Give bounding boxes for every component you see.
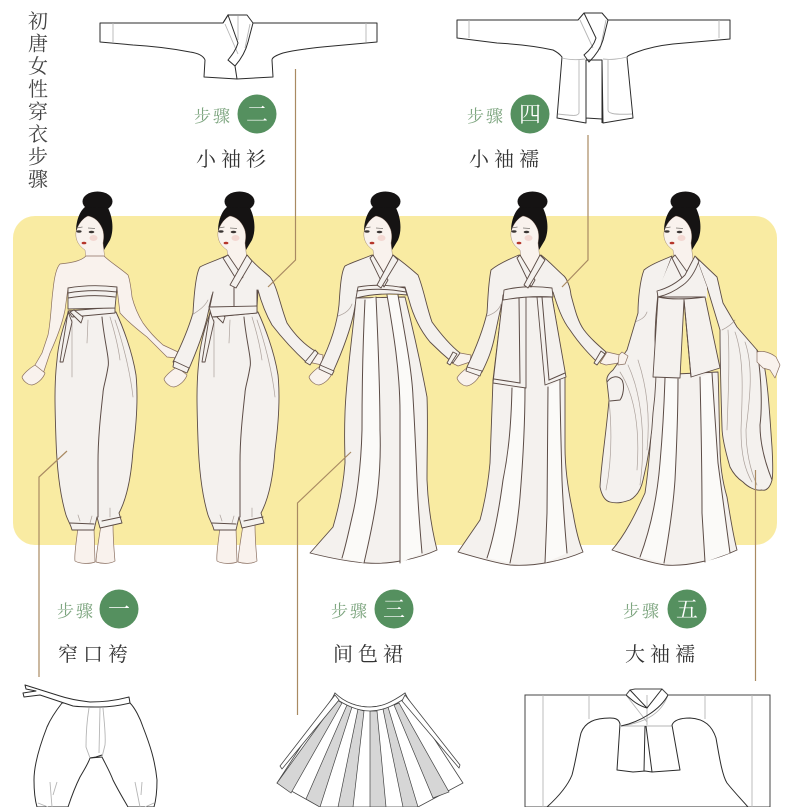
guide line: step 3 [298,452,351,715]
right hand [600,352,620,365]
figure 2: small sleeve shirt [164,192,323,563]
garment name: 间色裙 [333,643,408,666]
head [218,192,254,284]
jacket right panel [537,297,566,385]
step 1 heading: 一 [108,597,130,622]
skirt light panels [342,297,380,563]
skirt [612,372,737,565]
chest fill [658,257,707,298]
head [364,192,400,284]
bodice and sleeves [320,255,460,372]
guide line: step 4 [562,135,588,287]
skirt lines [487,380,567,563]
skirt lines [342,295,422,563]
step 5 heading [623,590,706,666]
step 3 heading [331,590,414,666]
step 2 heading [194,94,276,171]
head [76,192,112,284]
left sleeve folds [606,312,648,490]
left hand [457,366,480,386]
jacket left panel [493,295,526,388]
figure 5: large sleeve robe [600,192,780,565]
figure 4: small sleeve jacket [457,192,620,565]
figure 3: striped skirt [309,192,471,563]
line art: trousers [23,685,157,807]
vertical title: 衣 [28,123,48,146]
step 2 heading: 二 [246,102,268,127]
step label: 步骤 [623,602,661,621]
collar [517,255,535,287]
right sleeve folds [722,320,757,485]
trousers [55,307,137,563]
waistband [333,693,407,711]
left tie [280,695,339,769]
number badge [374,590,414,628]
vertical title: 女 [28,55,48,78]
right hand [452,353,471,366]
waist tie [209,306,257,317]
step label: 步骤 [57,602,95,621]
jacket body [653,297,720,378]
bust band [356,285,407,298]
right large sleeve [696,257,773,490]
sleeves and jacket shoulders [467,255,606,372]
line art: small sleeve shirt [100,15,377,79]
number badge [238,94,276,134]
right hand [757,351,780,378]
torso and arms [35,256,178,377]
collar [223,255,243,282]
chest wrap [68,286,117,309]
cuffs [319,365,334,375]
skirt [310,297,437,563]
garment name: 窄口袴 [58,643,133,666]
step 5 heading: 五 [676,597,698,622]
right hand [308,352,323,365]
left hand [309,365,332,385]
vertical title: 穿 [28,100,48,123]
yellow background panel [13,216,777,545]
step 3 heading: 三 [383,597,405,622]
figure 1: trousers only [22,192,178,563]
guide line: step 1 [39,451,67,677]
step 4 heading: 四 [519,102,541,127]
line art: striped skirt [277,693,463,807]
number badge [100,590,138,628]
vertical title: 初 [28,10,48,33]
collar [370,255,388,287]
left hand [22,365,45,385]
vertical title: 性 [28,78,48,101]
cuff [173,361,189,373]
number badge [668,590,706,628]
garment name: 大袖襦 [625,643,700,666]
step label: 步骤 [467,107,505,126]
garment name: 小袖襦 [469,148,544,171]
shirt [173,255,315,371]
line art: small sleeve jacket [457,13,730,123]
cuffs [466,367,482,376]
head [664,192,700,284]
right tie [402,695,460,768]
grey stripes [277,700,449,807]
step label: 步骤 [331,602,369,621]
vertical title: 步 [28,146,48,169]
collar wrap [672,255,690,282]
trousers [197,307,279,563]
vertical title: 骤 [28,168,48,191]
head [511,192,548,284]
step 1 heading [57,590,138,666]
garment name: 小袖衫 [196,148,271,171]
step 4 heading [467,94,550,171]
number badge [510,94,550,134]
step label: 步骤 [194,107,232,126]
guide line: step 2 [268,69,296,287]
left hand [164,367,187,387]
bust band [503,287,553,300]
skirt light panels [487,388,525,563]
vertical title: 唐 [28,33,48,56]
line art: large sleeve robe [525,689,770,807]
left hand on sleeve [618,352,628,365]
skirt [458,297,583,565]
skirt light panels [640,378,678,563]
guide line: step 5 [754,470,756,681]
skirt lines [640,373,730,563]
left large sleeve [600,256,672,503]
